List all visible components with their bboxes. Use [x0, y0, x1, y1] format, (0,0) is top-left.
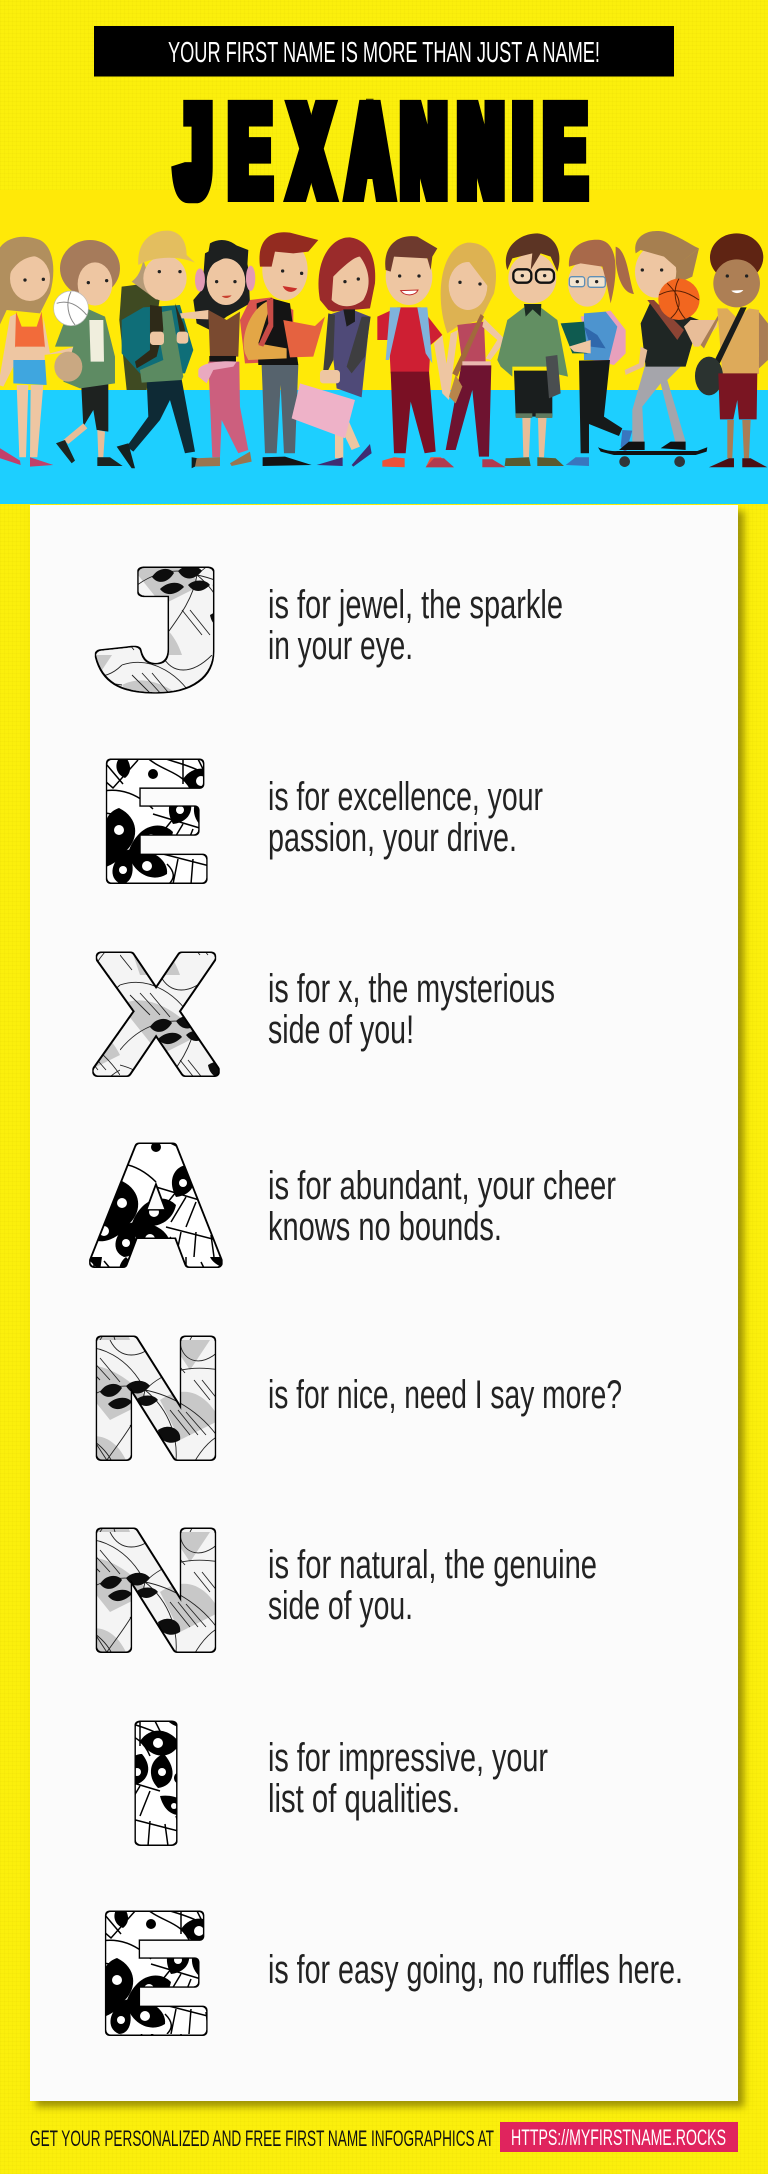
letter X: X: [97, 922, 215, 1106]
letter N: N: [90, 1306, 222, 1490]
meaning of E: passion, your drive.: [268, 816, 517, 860]
header strip: [94, 26, 674, 77]
meaning of E: is for excellence, your: [268, 775, 543, 819]
person: girl in orange top: [0, 237, 75, 467]
row: A: [91, 1113, 616, 1297]
person: skateboarder with basketball: [598, 231, 717, 467]
meaning of X: is for x, the mysterious: [268, 967, 555, 1011]
person: girl with headphones: [180, 240, 255, 467]
row: N: [90, 1498, 597, 1682]
meaning of I: is for impressive, your: [268, 1736, 548, 1780]
meaning of J: is for jewel, the sparkle: [268, 583, 563, 627]
letter A: A: [91, 1113, 221, 1297]
row: J: [99, 537, 563, 721]
blue floor band: [0, 390, 768, 504]
meaning of I: list of qualities.: [268, 1777, 460, 1821]
letter E: E: [101, 729, 208, 913]
person: boy with book: [240, 232, 325, 466]
row: N: [90, 1306, 622, 1490]
footer call to action: GET YOUR PERSONALIZED AND FREE FIRST NAME INFOGRAPHICS AT: [30, 2126, 494, 2151]
people background band: [0, 190, 768, 390]
letter E: E: [100, 1881, 208, 2065]
row: E: [101, 729, 543, 913]
person: boy with cap and backpack: [117, 231, 208, 468]
person: boy in sleeveless jersey with bag: [695, 233, 768, 467]
person: boy in red tee: [377, 236, 454, 467]
row: X: [97, 922, 555, 1106]
meaning of A: is for abundant, your cheer: [268, 1164, 616, 1208]
person: girl with pink bag: [292, 237, 375, 467]
person: blonde girl: [426, 243, 506, 467]
title: name: JEXANNIE: [177, 78, 585, 224]
person: boy with glasses: [497, 233, 568, 466]
person: girl with ponytail: [561, 240, 634, 466]
meaning of A: knows no bounds.: [268, 1205, 502, 1249]
letter J: J: [99, 537, 222, 721]
meaning of N: is for nice, need I say more?: [268, 1373, 622, 1417]
meaning of J: in your eye.: [268, 624, 413, 668]
row: E: [100, 1881, 683, 2065]
illustration: group of students, left half: [0, 231, 375, 468]
row: I: [128, 1691, 548, 1875]
meaning of N: is for natural, the genuine: [268, 1543, 597, 1587]
meaning of N: side of you.: [268, 1584, 413, 1628]
person: girl with volleyball: [54, 240, 123, 466]
illustration: group of students, right half: [377, 231, 768, 467]
letter I: I: [128, 1691, 184, 1875]
white content panel: [30, 505, 738, 2101]
meaning of X: side of you!: [268, 1008, 414, 1052]
letter N: N: [90, 1498, 222, 1682]
